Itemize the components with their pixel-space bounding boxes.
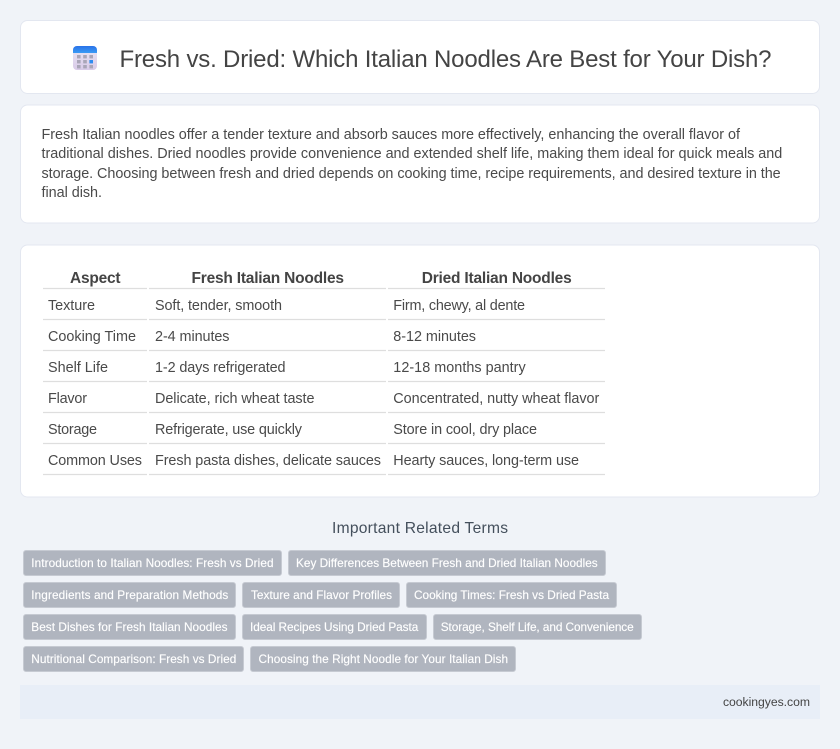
intro paragraph: storage. Choosing between fresh and dried depends on cooking time, recipe requirements, and desired texture in the [42,166,781,182]
tag: Choosing the Right Noodle for Your Italian Dish [258,652,508,666]
tag [406,582,616,608]
row: common uses [48,453,579,469]
row: cooking time: Cooking Time [48,329,136,345]
footer bar [20,685,820,719]
panel: introduction [20,105,820,223]
row: flavor: Flavor [48,391,87,407]
row: cooking time [48,329,476,345]
panel: comparison table [20,245,820,497]
row: common uses: Hearty sauces, long-term use [393,453,579,469]
row: flavor: Concentrated, nutty wheat flavor [393,391,600,407]
intro paragraph [42,127,782,201]
tag: Ideal Recipes Using Dried Pasta [250,620,419,634]
row: shelf life: Shelf Life [48,360,108,376]
table header row: Fresh Italian Noodles [192,270,344,287]
tag [24,614,236,640]
tag [288,550,606,576]
tag [242,614,426,640]
tag [250,646,516,672]
tag: Ingredients and Preparation Methods [31,588,228,602]
tag: Key Differences Between Fresh and Dried Italian Noodles [296,556,598,570]
tag: Texture and Flavor Profiles [251,588,392,602]
tag: Introduction to Italian Noodles: Fresh vs Dried [31,556,273,570]
tag [24,582,236,608]
row: texture [48,298,525,314]
table header row [70,270,572,287]
intro paragraph: traditional dishes. Dried noodles provide convenience and extended shelf life, making them ideal for quick meals and [42,146,782,162]
panel: title card [20,20,820,94]
related terms tags [24,550,642,672]
icon: calendar [73,46,97,70]
row: common uses: Common Uses [48,453,142,469]
row: storage: Refrigerate, use quickly [155,422,303,438]
tag: Storage, Shelf Life, and Convenience [441,620,634,634]
row: flavor [48,391,600,407]
row: cooking time: 2-4 minutes [155,329,230,345]
row: common uses: Fresh pasta dishes, delicate sauces [155,453,381,469]
tag [24,550,282,576]
title: Fresh vs. Dried: Which Italian Noodles Are Best for Your Dish? [120,46,772,73]
row: storage [48,422,537,438]
row: shelf life: 12-18 months pantry [393,360,526,376]
table header row: Aspect [70,270,120,287]
intro paragraph: final dish. [42,185,102,201]
tag [24,646,244,672]
row: texture: Firm, chewy, al dente [393,298,525,314]
tag [434,614,642,640]
row: flavor: Delicate, rich wheat taste [155,391,314,407]
row: texture: Soft, tender, smooth [155,298,282,314]
tag: Best Dishes for Fresh Italian Noodles [31,620,228,634]
row: texture: Texture [48,298,95,314]
table header row: Dried Italian Noodles [422,270,572,287]
tag: Cooking Times: Fresh vs Dried Pasta [414,588,609,602]
row: shelf life [48,360,526,376]
row: cooking time: 8-12 minutes [393,329,476,345]
intro paragraph: Fresh Italian noodles offer a tender texture and absorb sauces more effectively, enhancing the overall flavor of [42,127,741,143]
footer source: cookingyes.com [723,695,810,709]
tag [242,582,400,608]
row: shelf life: 1-2 days refrigerated [155,360,286,376]
row: storage: Storage [48,422,97,438]
tag: Nutritional Comparison: Fresh vs Dried [31,652,236,666]
heading: related terms: Important Related Terms [332,520,508,537]
row: storage: Store in cool, dry place [393,422,537,438]
